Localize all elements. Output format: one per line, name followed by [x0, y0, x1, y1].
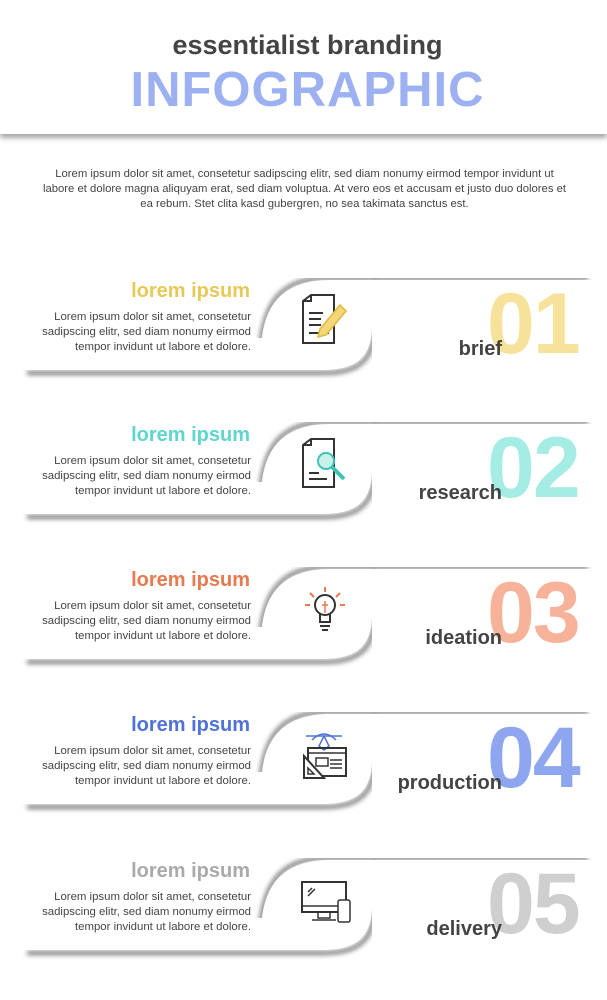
text 3: Lorem ipsum dolor sit amet, consetetur	[54, 600, 251, 612]
text 5: Lorem ipsum dolor sit amet, consetetur	[54, 891, 251, 903]
subtitle: essentialist branding	[172, 30, 443, 60]
intro text: Lorem ipsum dolor sit amet, consetetur sadipscing elitr, sed diam nonumy eirmod tempor invidunt ut labore et dolore magna aliquyam erat, sed diam voluptua. At vero eos et accusam et justo duo dolores et ea rebum. Stet clita kasd gubergren, no sea takimata sanctus est.	[43, 168, 566, 210]
icon: light bulb	[305, 587, 345, 631]
step 2	[24, 420, 591, 522]
number 01: 01	[487, 276, 579, 372]
text 4	[42, 745, 251, 787]
number 02: 02	[487, 420, 579, 516]
step 3	[24, 565, 591, 668]
text 1: Lorem ipsum dolor sit amet, consetetur	[54, 311, 251, 323]
text 1: sadipscing elitr, sed diam nonumy eirmod	[42, 326, 251, 338]
text 4: tempor invidunt ut labore et dolore.	[75, 775, 251, 787]
icon: document magnifier	[302, 438, 346, 488]
text 5: sadipscing elitr, sed diam nonumy eirmod	[42, 906, 251, 918]
text 2: Lorem ipsum dolor sit amet, consetetur	[54, 455, 251, 467]
heading 1: lorem ipsum	[131, 280, 250, 302]
text 1	[42, 311, 251, 353]
text 5	[42, 891, 251, 933]
text 3: tempor invidunt ut labore et dolore.	[75, 630, 251, 642]
label brief: brief	[459, 338, 502, 360]
text 4: Lorem ipsum dolor sit amet, consetetur	[54, 745, 251, 757]
text 3	[42, 600, 251, 642]
heading 3: lorem ipsum	[131, 569, 250, 591]
heading 5: lorem ipsum	[131, 860, 250, 882]
text 5: tempor invidunt ut labore et dolore.	[75, 921, 251, 933]
header band	[0, 0, 607, 134]
text 2: tempor invidunt ut labore et dolore.	[75, 485, 251, 497]
label production: production	[398, 772, 502, 794]
number 03: 03	[487, 565, 579, 661]
icon: design tools	[303, 733, 347, 779]
heading 4: lorem ipsum	[131, 714, 250, 736]
label ideation: ideation	[425, 627, 502, 649]
number 05: 05	[487, 856, 579, 952]
text 3: sadipscing elitr, sed diam nonumy eirmod	[42, 615, 251, 627]
text 4: sadipscing elitr, sed diam nonumy eirmod	[42, 760, 251, 772]
label delivery: delivery	[426, 918, 502, 940]
text 2	[42, 455, 251, 497]
step 5	[24, 856, 591, 958]
heading 2: lorem ipsum	[131, 424, 250, 446]
text 2: sadipscing elitr, sed diam nonumy eirmod	[42, 470, 251, 482]
label research: research	[419, 482, 502, 504]
number 04: 04	[487, 710, 579, 806]
title: INFOGRAPHIC	[130, 63, 484, 117]
step 1	[24, 276, 591, 378]
step 4	[24, 710, 591, 812]
text 1: tempor invidunt ut labore et dolore.	[75, 341, 251, 353]
icon: monitor and phone	[301, 881, 351, 923]
icon: document pencil	[302, 294, 347, 344]
